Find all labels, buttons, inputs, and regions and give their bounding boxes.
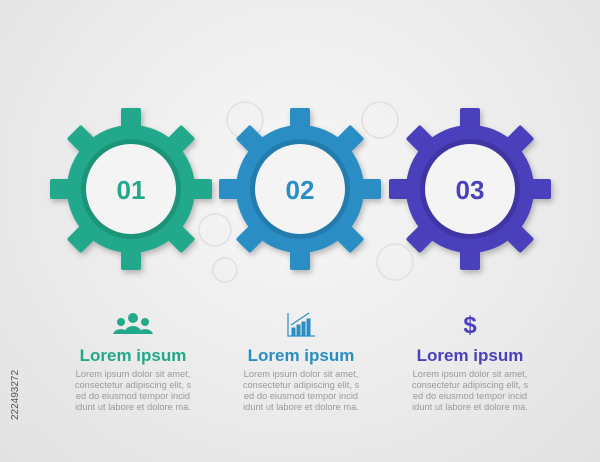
column 3 xyxy=(412,346,528,412)
column 3: Lorem ipsum dolor sit amet, xyxy=(413,369,527,379)
column 1: Lorem ipsum dolor sit amet, xyxy=(76,369,190,379)
column 1: ed do eiusmod tempor incid xyxy=(76,391,190,401)
column 3: ed do eiusmod tempor incid xyxy=(413,391,527,401)
column 2: Lorem ipsum dolor sit amet, xyxy=(244,369,358,379)
gear 02: 02 xyxy=(286,175,314,205)
icon: dollar: $ xyxy=(463,312,477,339)
column 1: consectetur adipiscing elit, s xyxy=(75,380,191,390)
gear 03: 03 xyxy=(456,175,484,205)
icon: chart xyxy=(288,313,315,336)
column 2: consectetur adipiscing elit, s xyxy=(243,380,359,390)
column 2: ed do eiusmod tempor incid xyxy=(244,391,358,401)
gear 03 xyxy=(355,74,585,304)
gear 01 xyxy=(16,74,246,304)
column 3: consectetur adipiscing elit, s xyxy=(412,380,528,390)
column 2 xyxy=(243,346,359,412)
column 2: Lorem ipsum xyxy=(248,346,354,365)
icon: people xyxy=(113,313,153,334)
column 2: idunt ut labore et dolore ma. xyxy=(243,402,359,412)
column 1 xyxy=(75,346,191,412)
column 3: idunt ut labore et dolore ma. xyxy=(412,402,528,412)
column 3: Lorem ipsum xyxy=(417,346,523,365)
column 1: Lorem ipsum xyxy=(80,346,186,365)
decorative faint gears xyxy=(199,102,413,282)
gear 02 xyxy=(185,74,415,304)
column 1: idunt ut labore et dolore ma. xyxy=(75,402,191,412)
vertical id: 222493272 xyxy=(10,370,21,420)
gear 01: 01 xyxy=(117,175,145,205)
